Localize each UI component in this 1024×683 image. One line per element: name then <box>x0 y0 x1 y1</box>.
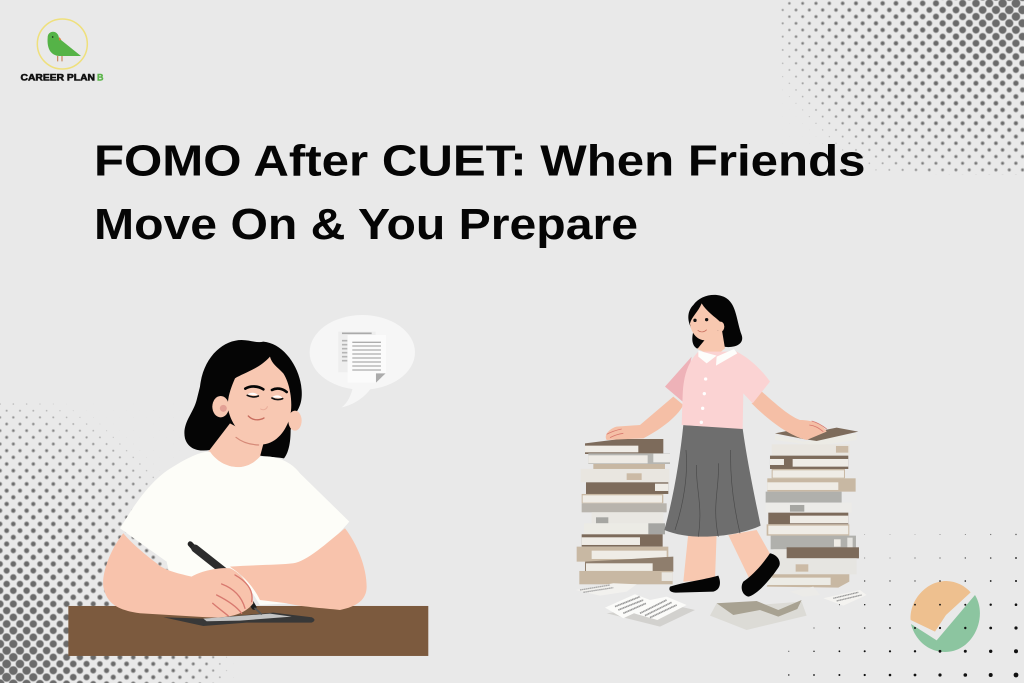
face <box>690 303 724 340</box>
loose papers and open books <box>576 583 867 630</box>
ears <box>212 396 302 431</box>
blouse <box>665 349 770 429</box>
speech bubble with documents <box>310 315 415 407</box>
face <box>228 357 291 444</box>
arms <box>606 390 827 440</box>
finger lines <box>213 575 252 616</box>
left book stack <box>577 439 673 584</box>
desk <box>68 606 428 656</box>
tablet <box>163 613 314 626</box>
logo wordmark: B <box>97 72 104 82</box>
shoes <box>669 553 780 597</box>
title: Move On & You Prepare <box>94 201 638 249</box>
writing hand and left arm <box>103 533 253 618</box>
neck <box>697 328 725 357</box>
facial features <box>236 386 287 445</box>
logo emblem: bird in ring <box>37 19 87 69</box>
skirt <box>664 425 761 537</box>
title <box>94 138 866 249</box>
illustration: girl writing at desk <box>68 315 428 656</box>
hair <box>184 340 302 458</box>
right book stack <box>766 428 859 588</box>
right arm <box>230 528 367 610</box>
title: FOMO After CUET: When Friends <box>94 138 866 186</box>
logo: Career Plan B <box>20 19 104 82</box>
neck <box>208 423 264 467</box>
t-shirt <box>120 452 349 605</box>
pen <box>190 544 261 614</box>
illustration: girl standing between book stacks <box>576 295 867 630</box>
hair <box>688 295 742 348</box>
legs <box>683 530 772 582</box>
finger lines <box>607 421 827 438</box>
halftone dot grid: bottom right <box>788 534 1018 677</box>
logo wordmark: CAREER PLAN <box>20 72 95 82</box>
icon: orange and green check badge <box>911 581 980 652</box>
